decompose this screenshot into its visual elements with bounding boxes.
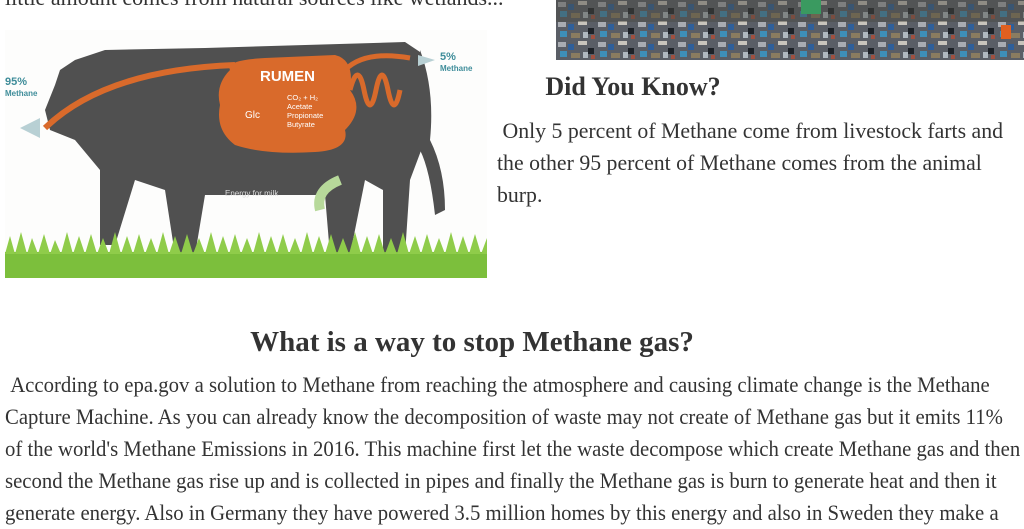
- rumen: Propionate: [287, 111, 323, 120]
- text: methane capture: of the world's Methane Emissions in 2016. This machine first let the waste decompose which create Methane gas and then: [5, 437, 1020, 461]
- text: did you know: [497, 119, 1003, 207]
- rumen: Acetate: [287, 102, 312, 111]
- rumen: Butyrate: [287, 120, 315, 129]
- labels: Methane: [5, 89, 38, 98]
- image: cow methane diagram: [5, 42, 487, 278]
- labels: [5, 51, 473, 98]
- image: landfill trash: [556, 0, 1024, 60]
- heading: did you know: Did You Know?: [545, 72, 721, 101]
- text: methane capture: According to epa.gov a solution to Methane from reaching the atmosphere and causing climate change is the Methane: [10, 373, 990, 397]
- text: methane capture: Capture Machine. As you can already know the decomposition of waste may not create of Methane gas but it emits 11%: [5, 405, 1003, 429]
- labels: Methane: [440, 64, 473, 73]
- heading: stop methane: What is a way to stop Methane gas?: [250, 326, 694, 358]
- rumen: RUMEN: [260, 68, 315, 85]
- image: cow methane diagram: Energy for milk: [225, 189, 279, 198]
- rumen: CO₂ + H₂: [287, 93, 318, 102]
- text: methane capture: second the Methane gas rise up and is collected in pipes and finally the Methane gas is burn to generate heat and then it: [5, 469, 997, 493]
- grass: [5, 252, 487, 278]
- rumen: [45, 55, 410, 153]
- rumen: Glc: [245, 110, 260, 121]
- text: did you know: Only 5 percent of Methane come from livestock farts and: [502, 119, 1003, 143]
- text: methane capture: [5, 373, 1020, 525]
- text: did you know: the other 95 percent of Methane comes from the animal: [497, 151, 982, 175]
- labels: 95%: [5, 76, 27, 88]
- labels: 5%: [440, 51, 456, 63]
- cow body: [45, 42, 445, 255]
- text: methane capture: generate energy. Also in Germany they have powered 3.5 million homes by this energy and also in Sweden they make a: [5, 501, 999, 525]
- text: did you know: burp.: [497, 183, 542, 207]
